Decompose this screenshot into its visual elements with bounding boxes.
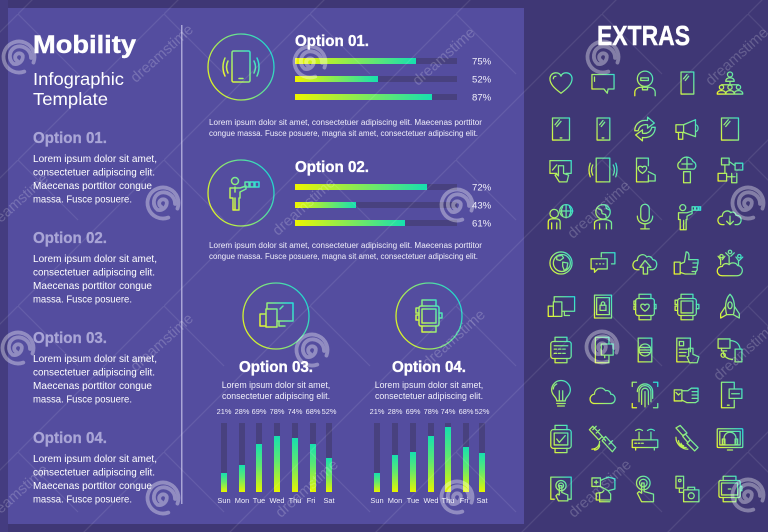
sidebar option 02: massa. Fusce posuere. (33, 294, 132, 306)
sidebar option 01: Option 01. (33, 130, 107, 147)
icon: smartwatch in circle (396, 283, 462, 349)
bar chart: option 02 (295, 182, 492, 230)
sidebar option 01: Maecenas porttitor congue (33, 181, 152, 192)
icon: watch with check (551, 425, 571, 453)
heading: option 02: Option 02. (295, 159, 369, 176)
icon: thumbs up (674, 252, 698, 274)
icon: people on cloud (717, 250, 743, 276)
icon: person with globe head (594, 205, 612, 229)
icon: smartwatch (675, 294, 699, 320)
sidebar option 04: Option 04. (33, 430, 107, 447)
icon: fingerprint scan (632, 382, 658, 408)
icon: vibrating phone (589, 158, 617, 182)
icon: tablet touch (551, 477, 571, 501)
sidebar option 03: consectetuer adipiscing elit. (33, 368, 155, 378)
sidebar option 04: Lorem ipsum dolor sit amet, (33, 454, 157, 465)
icon: person with badge (635, 71, 655, 96)
text block: option 02 description: Lorem ipsum dolor sit amet, consectetuer adipiscing elit. Maecenas porttitor (209, 240, 482, 250)
column chart: option 04: 28% (388, 407, 403, 416)
icon: cloud (590, 388, 615, 404)
icon: rocket (721, 294, 739, 318)
column chart: option 03: Thu (289, 496, 301, 505)
sidebar option 02: Lorem ipsum dolor sit amet, (33, 254, 157, 265)
column chart: option 03: 52% (322, 407, 337, 416)
column chart: option 04: 68% (459, 407, 474, 416)
icon: phone with heart (636, 158, 655, 182)
column chart: option 03: Tue (253, 496, 265, 505)
icon: monitor with headset (717, 429, 743, 450)
text block: option 01 description: congue massa. Fusce posuere, magna sit amet, consectetuer adipiscing elit. (209, 128, 478, 138)
icon: tablet (552, 118, 570, 140)
icon: chat bubbles (591, 253, 615, 272)
sidebar option 03: Maecenas porttitor congue (33, 381, 152, 392)
sidebar option 02: consectetuer adipiscing elit. (33, 268, 155, 278)
icon: cloud download (718, 211, 741, 225)
icon: watch with keypad (551, 337, 571, 363)
title: Mobility (33, 31, 136, 59)
column chart: option 04: Sun (370, 496, 384, 505)
text: dreamstime (564, 177, 634, 242)
icon: person speaking (678, 205, 701, 230)
icon: hand with watch (674, 388, 698, 403)
icon: phone (681, 72, 694, 94)
sidebar option 03: Option 03. (33, 330, 107, 347)
bar chart: option 01: 87% (472, 92, 492, 104)
icon: tablet (722, 118, 738, 140)
sidebar option 03: massa. Fusce posuere. (33, 394, 132, 406)
column chart: option 04: Tue (407, 496, 419, 505)
column chart: option 04: 21% (370, 407, 385, 416)
column chart: option 03: Mon (235, 496, 249, 505)
icon: hand tablet (592, 477, 615, 502)
icon: camera chain (676, 476, 699, 502)
icon: person with speech in circle (208, 160, 274, 226)
column chart: option 04: Fri (460, 496, 469, 505)
icon: touch screen (550, 161, 571, 182)
text: dreamstime (272, 456, 342, 521)
bar chart: option 01: 52% (472, 74, 492, 86)
subtitle: Infographic (33, 69, 124, 89)
text block: option 01 description (209, 117, 482, 138)
icon: refresh arrows (635, 117, 655, 141)
column chart: option 03: 28% (235, 407, 250, 416)
icon grid: extras (548, 71, 743, 502)
sidebar option 03 (33, 330, 157, 406)
icon: phone with globe (638, 338, 652, 362)
panel: extras (524, 0, 768, 532)
column chart: option 04: 78% (424, 407, 439, 416)
panel: main infographic (0, 0, 524, 532)
column chart: option 03: Fri (307, 496, 316, 505)
heading: extras: EXTRAS (597, 20, 690, 51)
icon: flow network (718, 158, 743, 183)
column chart: option 04: 69% (406, 407, 421, 416)
text: dreamstime (565, 456, 635, 521)
sidebar option 04: consectetuer adipiscing elit. (33, 468, 155, 478)
icon: devices (548, 297, 575, 316)
sidebar option 02 (33, 230, 157, 306)
text block: option 04 description (375, 380, 483, 401)
icon: cloud over phone (678, 157, 696, 183)
text: dreamstime (409, 24, 479, 89)
subtitle (33, 69, 124, 109)
column chart: option 04: 74% (441, 407, 456, 416)
sidebar option 04: massa. Fusce posuere. (33, 494, 132, 506)
icon: satellite (589, 426, 616, 452)
heading: option 04: Option 04. (392, 359, 466, 376)
column chart: option 03: 74% (288, 407, 303, 416)
text: dreamstime (419, 306, 489, 371)
sidebar option 01: Lorem ipsum dolor sit amet, (33, 154, 157, 165)
bar chart: option 02: 43% (472, 200, 492, 212)
column chart: option 04: 52% (475, 407, 490, 416)
icon: smartwatch (719, 476, 742, 502)
sidebar option 01: consectetuer adipiscing elit. (33, 168, 155, 178)
icon: vibrating phone in circle (208, 34, 274, 100)
column chart: option 04: Mon (388, 496, 402, 505)
text: dreamstime (269, 174, 339, 239)
sidebar option 01 (33, 130, 157, 206)
text: dreamstime (127, 21, 197, 86)
column chart: option 03: Sat (323, 496, 335, 505)
text block: option 03 description: Lorem ipsum dolor sit amet, (222, 380, 330, 390)
text block: option 04 description: consectetuer adipiscing elit. (375, 391, 483, 401)
icon: touch tap (636, 476, 654, 502)
icon: device transfer (718, 339, 742, 362)
sidebar option 04 (33, 430, 157, 506)
column chart: option 04: Thu (442, 496, 454, 505)
bar chart: option 02: 61% (472, 218, 492, 230)
bar chart: option 02: 72% (472, 182, 492, 194)
heading: option 03: Option 03. (239, 359, 313, 376)
icon: phone (597, 118, 610, 140)
bar chart: option 01: 75% (472, 56, 492, 68)
icon: router (632, 429, 658, 450)
icon: cloud upload (633, 255, 657, 274)
sidebar option 02: Option 02. (33, 230, 107, 247)
column chart: option 04 (370, 407, 490, 505)
icon: phone with sms (722, 382, 742, 408)
text: dreamstime (127, 310, 197, 375)
subtitle: Template (33, 89, 108, 109)
icon: light bulb (552, 381, 570, 406)
bar chart: option 01 (295, 56, 492, 104)
column chart: option 03 (217, 407, 337, 505)
sidebar option 02: Maecenas porttitor congue (33, 281, 152, 292)
column chart: option 03: 68% (306, 407, 321, 416)
icon: chat bubble (592, 74, 614, 93)
column chart: option 03: Wed (269, 496, 285, 505)
column chart: option 04: Wed (423, 496, 439, 505)
sidebar option 04: Maecenas porttitor congue (33, 481, 152, 492)
text block: option 01 description: Lorem ipsum dolor sit amet, consectetuer adipiscing elit. Maecenas porttitor (209, 117, 482, 127)
text block: option 02 description (209, 240, 482, 261)
icon: heart (550, 73, 572, 93)
icon: phone with hand (677, 338, 699, 363)
icon: megaphone (676, 120, 698, 139)
text block: option 02 description: congue massa. Fusce posuere, magna sit amet, consectetuer adipiscing elit. (209, 251, 478, 261)
icon: watch with heart (634, 294, 656, 320)
heading: option 01: Option 01. (295, 33, 369, 50)
text block: option 03 description: consectetuer adipiscing elit. (222, 391, 330, 401)
column chart: option 03: 21% (217, 407, 232, 416)
sidebar option 01: massa. Fusce posuere. (33, 194, 132, 206)
column chart: option 03: 78% (270, 407, 285, 416)
icon: person with globe (548, 205, 573, 229)
text block: option 04 description: Lorem ipsum dolor sit amet, (375, 380, 483, 390)
column chart: option 03: 69% (252, 407, 267, 416)
text block: option 03 description (222, 380, 330, 401)
icon: satellite dish (676, 425, 698, 451)
icon: org chart (717, 72, 743, 94)
icon: devices in circle (243, 283, 309, 349)
icon: globe (550, 252, 572, 274)
column chart: option 03: Sun (217, 496, 231, 505)
sidebar option 03: Lorem ipsum dolor sit amet, (33, 354, 157, 365)
icon: linked devices (595, 337, 613, 363)
icon: tablet with lock (594, 295, 612, 318)
column chart: option 04: Sat (476, 496, 488, 505)
icon: microphone (637, 204, 653, 229)
